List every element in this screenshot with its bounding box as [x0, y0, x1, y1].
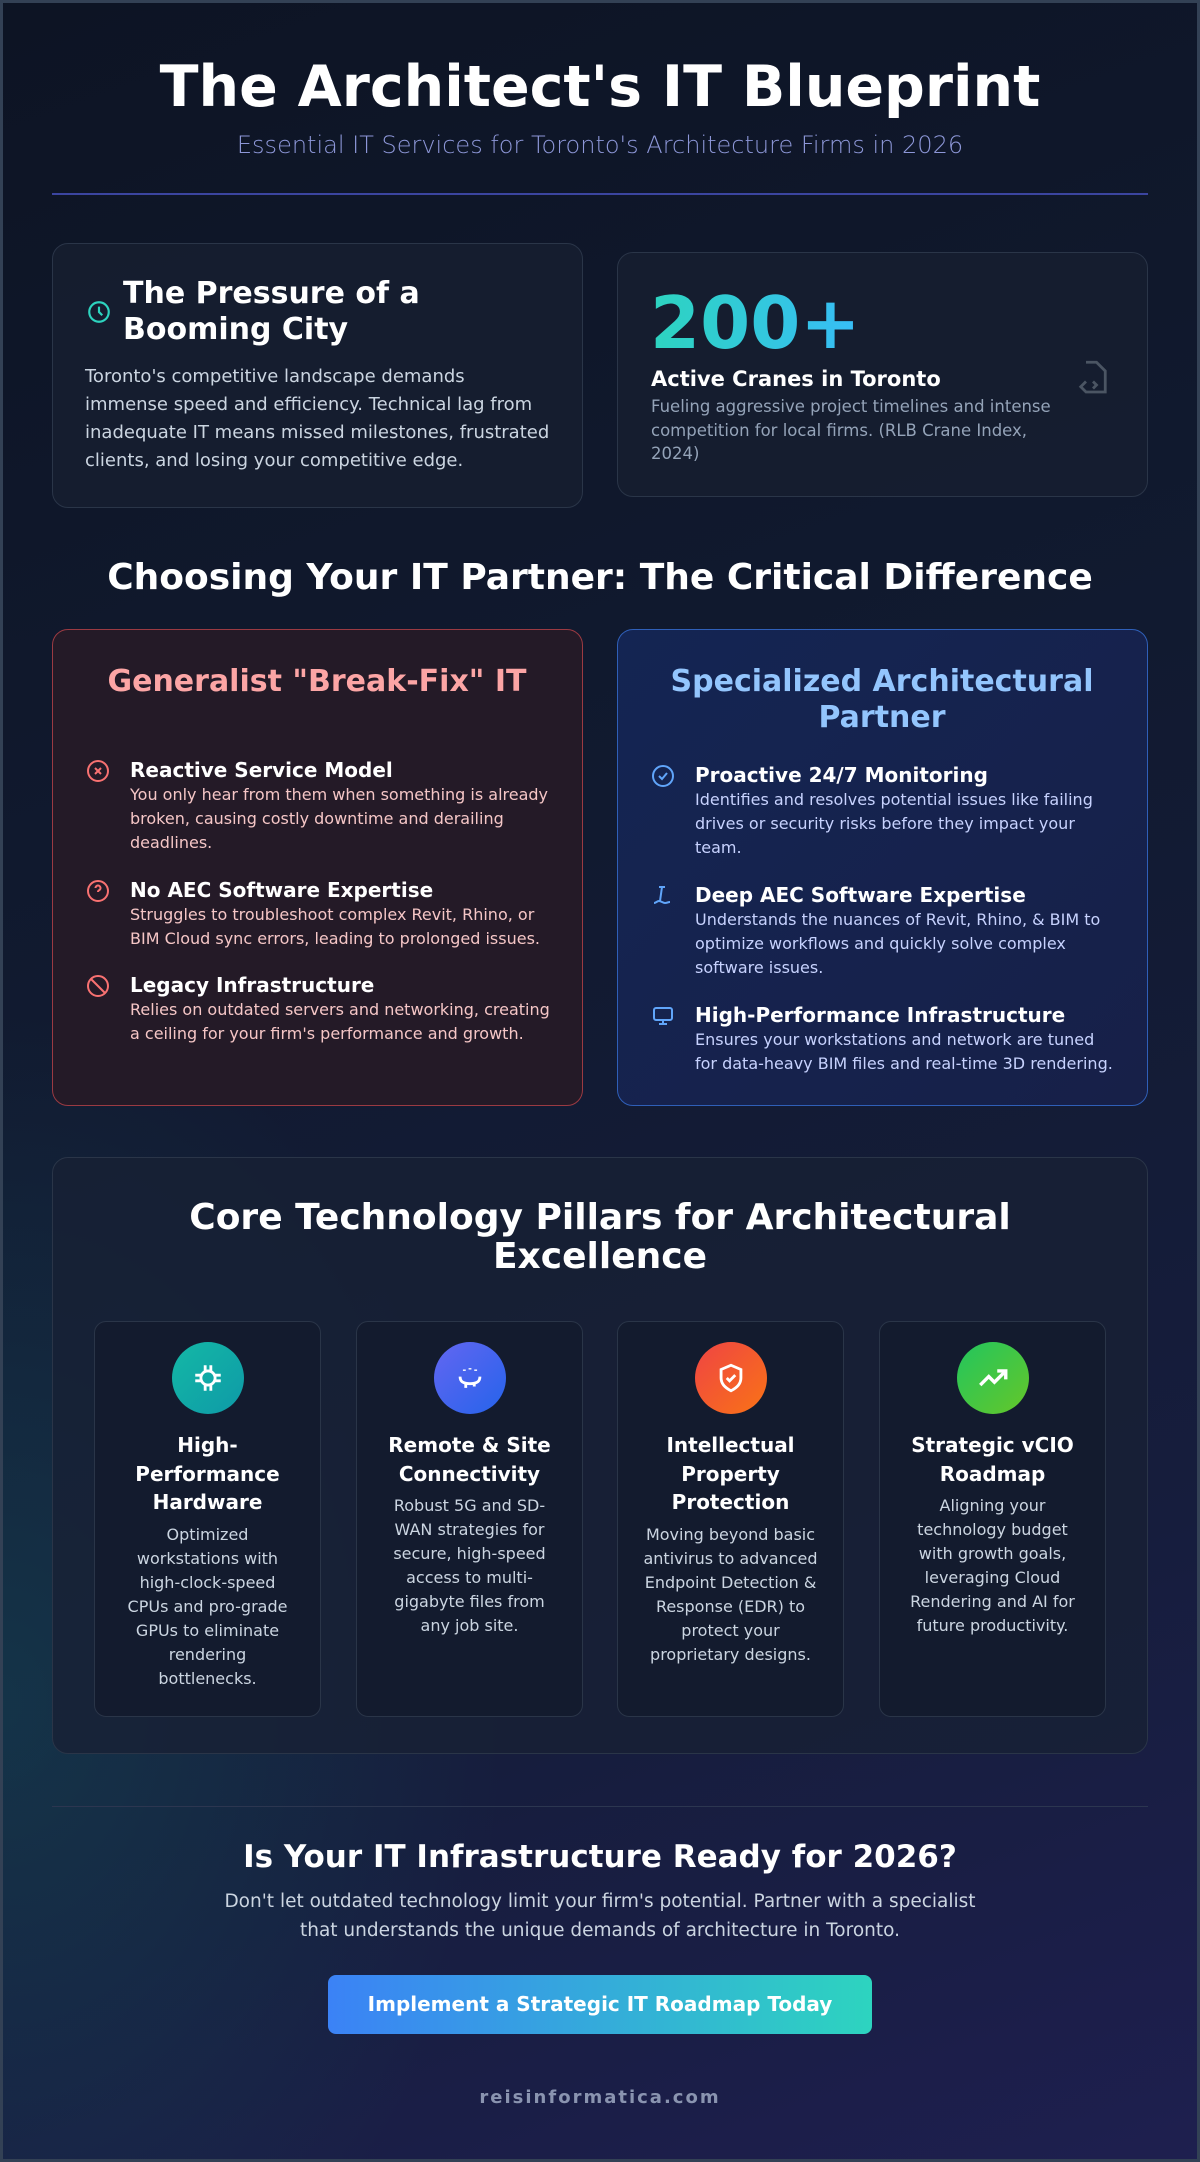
CTA text: [224, 1891, 976, 1941]
stat description: [651, 397, 1051, 463]
panel: pressure: [52, 243, 583, 508]
body text: [84, 366, 549, 471]
pillar: hardware: CPUs and pro-grade: [128, 1596, 287, 1616]
item: reactive: deadlines.: [130, 833, 212, 852]
item: AEC expertise: Understands the nuances of Revit, Rhino, & BIM to: [695, 910, 1100, 929]
pillar: IP protection: Response (EDR) to: [656, 1596, 805, 1616]
pillar: connectivity: Remote & Site: [388, 1433, 551, 1457]
pillar: IP protection: proprietary designs.: [650, 1644, 811, 1664]
pillar: IP protection: [617, 1321, 844, 1717]
pillar: hardware: workstations with: [137, 1548, 278, 1568]
pillar: hardware: rendering: [169, 1644, 246, 1664]
stat description: Fueling aggressive project timelines and intense: [651, 397, 1051, 416]
pillar: connectivity: access to multi-: [406, 1568, 533, 1587]
pillar: vCIO: [879, 1321, 1106, 1717]
pillar: hardware: High-: [177, 1433, 238, 1457]
heading: Specialized Architectural: [671, 664, 1093, 699]
pillar: hardware: high-clock-speed: [140, 1572, 275, 1592]
pillar: IP protection: Moving beyond basic: [646, 1524, 815, 1544]
body text: clients, and losing your competitive edge.: [85, 450, 463, 471]
heading: [123, 276, 420, 347]
icon: crane: [1078, 360, 1107, 394]
icon: clock: [88, 301, 110, 323]
heading: Booming City: [123, 312, 348, 347]
item: legacy: Legacy Infrastructure: [130, 973, 374, 997]
item: infrastructure: for data-heavy BIM files and real-time 3D rendering.: [695, 1054, 1113, 1073]
item: monitoring: team.: [695, 838, 742, 857]
pillar: connectivity: secure, high-speed: [393, 1544, 546, 1563]
pillar: vCIO: technology budget: [917, 1520, 1068, 1539]
item: monitoring: [652, 763, 1093, 857]
item: no AEC expertise: BIM Cloud sync errors, leading to prolonged issues.: [130, 929, 540, 948]
panel: core pillars: [52, 1157, 1148, 1754]
pillar: hardware: Optimized: [167, 1524, 248, 1544]
item: legacy: [87, 973, 550, 1043]
CTA text: Don't let outdated technology limit your firm's potential. Partner with a specialist: [224, 1891, 976, 1912]
CTA text: that understands the unique demands of architecture in Toronto.: [300, 1920, 900, 1941]
item: monitoring: Proactive 24/7 Monitoring: [695, 763, 988, 787]
item: infrastructure: High-Performance Infrastructure: [695, 1003, 1065, 1027]
pillar: hardware: [94, 1321, 321, 1717]
pillar: connectivity: Robust 5G and SD-: [394, 1496, 545, 1515]
stat label: Active Cranes in Toronto: [651, 367, 941, 391]
CTA heading: Is Your IT Infrastructure Ready for 2026?: [243, 1839, 957, 1875]
item: legacy: Relies on outdated servers and networking, creating: [130, 1000, 550, 1019]
item: reactive: You only hear from them when something is already: [130, 785, 548, 804]
item: AEC expertise: optimize workflows and quickly solve complex: [695, 934, 1066, 953]
panel: generalist: [52, 629, 583, 1106]
heading: [189, 1197, 1011, 1277]
item: legacy: a ceiling for your firm's performance and growth.: [130, 1024, 524, 1043]
pillar: vCIO: with growth goals,: [919, 1544, 1066, 1563]
item: monitoring: Identifies and resolves potential issues like failing: [695, 790, 1093, 809]
heading: [671, 664, 1093, 735]
heading: The Pressure of a: [123, 276, 420, 311]
item: no AEC expertise: No AEC Software Expertise: [130, 878, 433, 902]
body text: Toronto's competitive landscape demands: [85, 366, 465, 387]
item: no AEC expertise: Struggles to troubleshoot complex Revit, Rhino, or: [130, 905, 534, 924]
pillar: connectivity: [356, 1321, 583, 1717]
pillar: IP protection: Property: [681, 1462, 780, 1486]
heading: Core Technology Pillars for Architectural: [189, 1197, 1011, 1238]
heading: Generalist "Break-Fix" IT: [107, 664, 527, 699]
pillar: IP protection: Endpoint Detection &: [645, 1572, 816, 1592]
item: no AEC expertise: [87, 878, 540, 948]
panel: specialized: [617, 629, 1148, 1106]
pillar: connectivity: any job site.: [421, 1616, 518, 1635]
stat description: 2024): [651, 444, 699, 463]
body text: immense speed and efficiency. Technical lag from: [85, 394, 532, 415]
pillar: vCIO: leveraging Cloud: [925, 1568, 1060, 1587]
subtitle: Essential IT Services for Toronto's Architecture Firms in 2026: [237, 131, 963, 159]
pillar: connectivity: WAN strategies for: [395, 1520, 544, 1539]
item: infrastructure: Ensures your workstations and network are tuned: [695, 1030, 1094, 1049]
title: The Architect's IT Blueprint: [160, 54, 1040, 120]
stat number: 200+: [650, 281, 861, 365]
panel: crane stat: [617, 252, 1148, 497]
heading: Excellence: [493, 1236, 707, 1277]
item: reactive: [87, 758, 548, 852]
pillar: hardware: bottlenecks.: [158, 1668, 257, 1688]
pillar: IP protection: Intellectual: [666, 1433, 795, 1457]
item: AEC expertise: [654, 883, 1100, 977]
footer: reisinformatica.com: [479, 2087, 721, 2108]
pillar: connectivity: gigabyte files from: [394, 1592, 545, 1611]
pillar: vCIO: Rendering and AI for: [910, 1592, 1075, 1611]
item: AEC expertise: software issues.: [695, 958, 823, 977]
pillar: vCIO: Roadmap: [940, 1462, 1045, 1486]
pillar: vCIO: Strategic vCIO: [911, 1433, 1074, 1457]
item: monitoring: drives or security risks before they impact your: [695, 814, 1075, 833]
item: AEC expertise: Deep AEC Software Expertise: [695, 883, 1026, 907]
section heading: comparison: Choosing Your IT Partner: The Critical Difference: [107, 557, 1093, 598]
pillar: hardware: Performance: [135, 1462, 280, 1486]
pillar: vCIO: future productivity.: [917, 1616, 1068, 1635]
item: reactive: Reactive Service Model: [130, 758, 393, 782]
pillar: IP protection: antivirus to advanced: [643, 1548, 818, 1568]
item: infrastructure: [653, 1003, 1113, 1073]
pillar: IP protection: Protection: [672, 1490, 789, 1514]
pillar: IP protection: protect your: [681, 1620, 780, 1640]
body text: inadequate IT means missed milestones, frustrated: [85, 422, 549, 443]
pillar: vCIO: Aligning your: [940, 1496, 1045, 1515]
pillar: hardware: GPUs to eliminate: [136, 1620, 279, 1640]
item: reactive: broken, causing costly downtime and derailing: [130, 809, 504, 828]
stat description: competition for local firms. (RLB Crane Index,: [651, 420, 1027, 440]
CTA button: [328, 1975, 872, 2034]
pillar: connectivity: Connectivity: [399, 1462, 540, 1486]
pillar: hardware: Hardware: [153, 1490, 262, 1514]
heading: Partner: [818, 700, 946, 735]
CTA button: Implement a Strategic IT Roadmap Today: [368, 1992, 832, 2016]
